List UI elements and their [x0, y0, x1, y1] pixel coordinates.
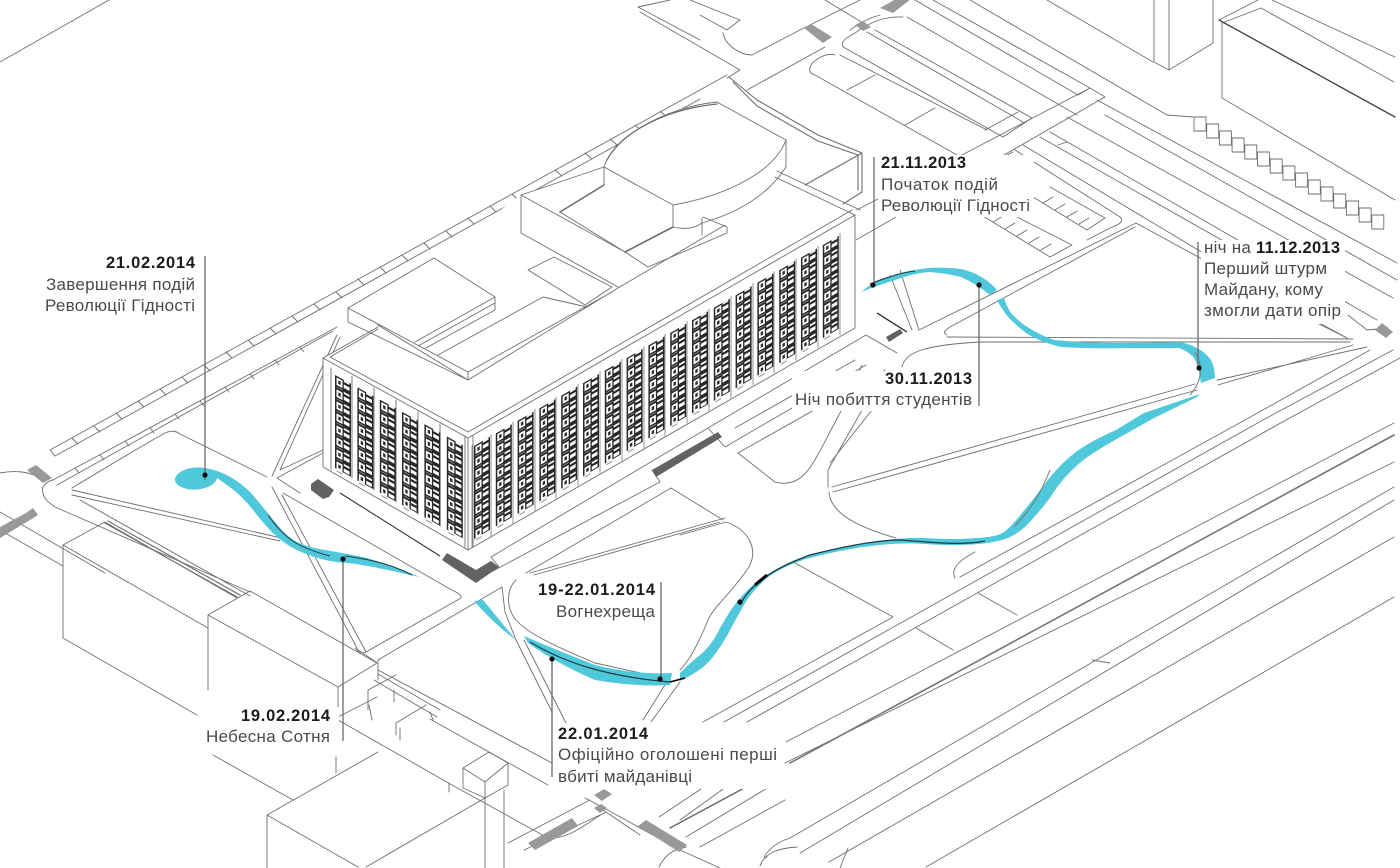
front of building — [491, 335, 897, 572]
annotation 19-22.01.2014: 19-22.01.2014 — [538, 581, 656, 599]
top-right buildings — [1154, 0, 1395, 200]
annotation 21.11.2013: Початок подій — [881, 175, 998, 194]
annotation 30.11.2013: 30.11.2013 — [885, 370, 972, 388]
annotation 19.02.2014: 19.02.2014 — [241, 707, 331, 725]
annotation 11.12.2013 — [1196, 238, 1345, 371]
annotation 22.01.2014: вбиті майданівці — [558, 767, 692, 786]
stair-step sidewalk — [1194, 117, 1384, 229]
annotation 22.01.2014 — [549, 656, 783, 789]
windows left face — [335, 375, 463, 541]
pilasters right — [472, 233, 840, 547]
annotation 11.12.2013: Майдану, кому — [1204, 280, 1324, 299]
annotation 30.11.2013 — [792, 282, 982, 411]
bottom-left buildings — [63, 522, 485, 868]
upper roads — [638, 0, 1032, 155]
left park and corner — [0, 431, 290, 596]
annotation 21.02.2014: Революції Гідності — [45, 296, 195, 315]
annotation 21.11.2013: Революції Гідності — [881, 196, 1030, 215]
annotation 22.01.2014: 22.01.2014 — [558, 725, 649, 743]
roof and walls — [323, 77, 862, 550]
annotation 21.02.2014: 21.02.2014 — [106, 254, 196, 272]
rear wing — [729, 77, 862, 204]
annotation 22.01.2014: Офіційно оголошені перші — [558, 745, 777, 764]
annotation 19.02.2014: Небесна Сотня — [206, 727, 330, 746]
annotation 19.02.2014 — [200, 556, 346, 747]
park right triangle — [890, 223, 1347, 338]
marker on route — [737, 599, 743, 605]
annotation 21.02.2014 — [40, 254, 208, 480]
parking — [978, 150, 1122, 257]
ribbon: end ellipse and tail — [174, 466, 420, 577]
annotation 19-22.01.2014: Вогнехреща — [556, 602, 656, 621]
pilasters left — [331, 368, 465, 547]
ribbon: crossing pieces — [474, 268, 1215, 685]
annotation 21.02.2014: Завершення подій — [46, 275, 195, 294]
lower-right diagonals — [703, 350, 1400, 722]
ribbon: dark overlays — [268, 271, 1200, 682]
curved hall — [604, 102, 786, 235]
bus shelters — [368, 674, 440, 740]
windows right face — [474, 236, 839, 542]
annotation 11.12.2013: Перший штурм — [1204, 259, 1327, 278]
annotation 19-22.01.2014 — [535, 581, 663, 682]
annotation 11.12.2013: ніч на 11.12.2013 — [1204, 238, 1340, 257]
stage box — [521, 167, 727, 287]
annotation 21.11.2013: 21.11.2013 — [881, 154, 966, 172]
annotation 30.11.2013: Ніч побиття студентів — [795, 390, 972, 409]
annotation 11.12.2013: змогли дати опір — [1204, 301, 1341, 320]
annotation 21.11.2013 — [870, 154, 1034, 288]
raised left block — [348, 258, 587, 380]
rear sidewalk bands — [50, 75, 727, 485]
route ribbon — [174, 268, 1215, 685]
tower — [449, 752, 508, 868]
building — [311, 77, 907, 583]
dark steps around building — [311, 313, 907, 583]
building body — [323, 77, 862, 550]
